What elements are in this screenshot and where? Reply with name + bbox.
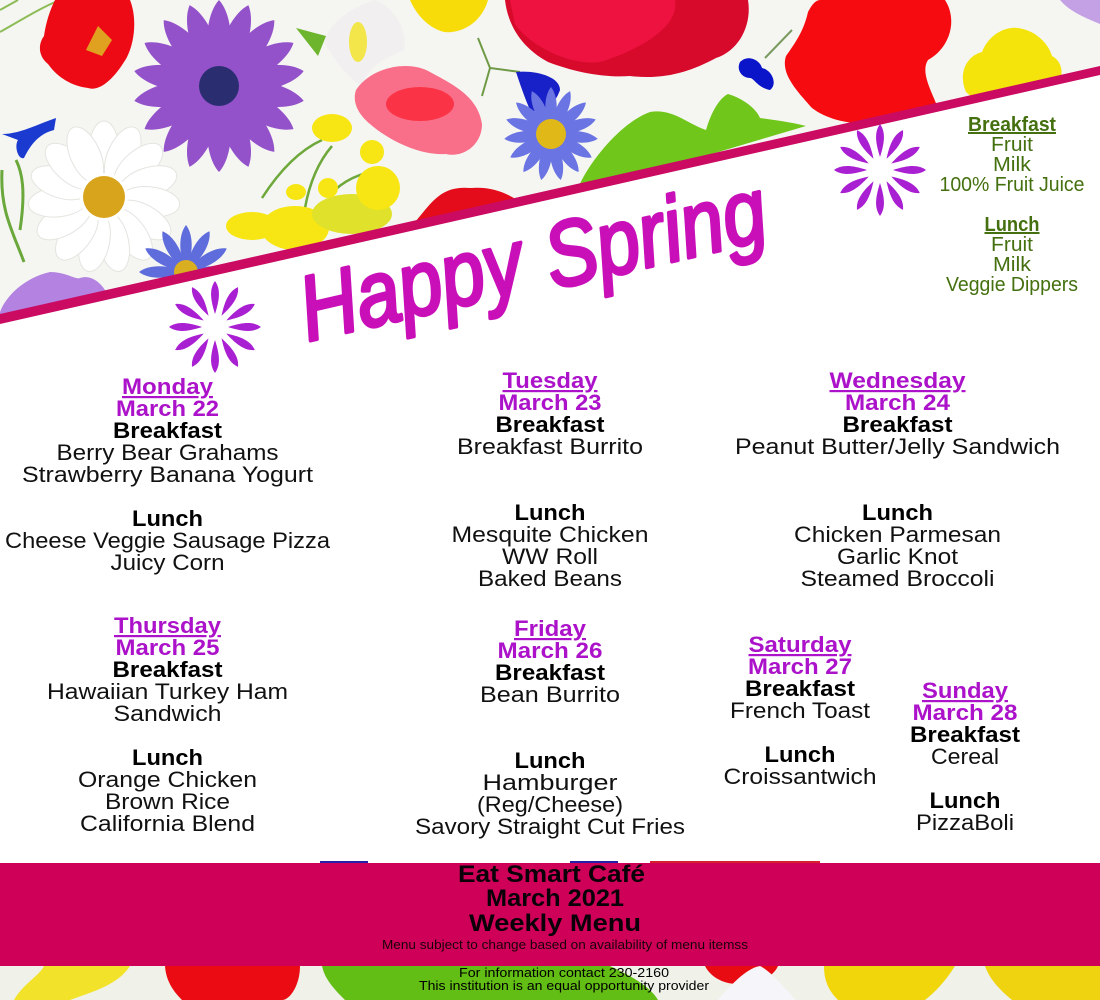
flower: red blossom behind ribbon	[416, 188, 514, 220]
panel: daily specials: Fruit	[991, 234, 1033, 256]
panel: Monday menu	[5, 374, 331, 575]
panel: Sunday menu	[910, 678, 1021, 835]
flower: yellow top	[410, 0, 488, 32]
panel: Wednesday menu: Peanut Butter/Jelly Sandwich	[735, 434, 1060, 459]
footer title	[458, 861, 645, 937]
panel: Friday menu: March 26	[498, 638, 602, 663]
diagonal pink ribbon	[0, 66, 1100, 324]
flower: purple daisy	[132, 0, 306, 172]
panel: Monday menu: Juicy Corn	[110, 550, 224, 575]
panel: daily specials	[940, 114, 1084, 296]
panel: Wednesday menu: Breakfast	[842, 412, 953, 437]
panel: Friday menu: Breakfast	[495, 660, 606, 685]
panel: Friday menu: Lunch	[514, 748, 586, 773]
panel: Wednesday menu	[735, 368, 1060, 591]
flower: lilac petals lower left	[0, 272, 105, 314]
panel: Monday menu: Monday	[122, 374, 214, 399]
panel: Sunday menu: March 28	[912, 700, 1018, 725]
panel: Sunday menu: PizzaBoli	[916, 810, 1014, 835]
flower: small blue daisy lower	[139, 225, 227, 278]
panel: Thursday menu: Lunch	[132, 745, 203, 770]
contact information: For information contact 230-2160	[459, 965, 669, 980]
flower: green leaf	[578, 94, 806, 190]
flower: red and white	[705, 966, 778, 984]
panel: Monday menu: March 22	[116, 396, 219, 421]
panel: Monday menu: Lunch	[132, 506, 203, 531]
left stem with blue bud	[2, 118, 56, 262]
flower: white daisy	[27, 121, 181, 274]
panel: Thursday menu: Brown Rice	[105, 789, 230, 814]
panel: Monday menu: Berry Bear Grahams	[56, 440, 278, 465]
flower: white and yellow blossom	[296, 22, 367, 62]
panel: Tuesday menu: March 23	[498, 390, 602, 415]
panel: Wednesday menu: Lunch	[862, 500, 933, 525]
panel: Monday menu: Strawberry Banana Yogurt	[22, 462, 313, 487]
flower: red petunia	[40, 0, 134, 89]
panel: daily specials: Lunch	[984, 214, 1040, 236]
title: Happy Spring: Happy	[289, 210, 537, 361]
panel: Saturday menu: March 27	[748, 654, 852, 679]
panel: daily specials: Fruit	[991, 134, 1033, 156]
panel: Thursday menu: Sandwich	[114, 701, 222, 726]
thin glimpse of flowers above band	[0, 860, 1100, 863]
panel: Wednesday menu: Steamed Broccoli	[800, 566, 994, 591]
panel: Saturday menu: Breakfast	[745, 676, 856, 701]
panel: Thursday menu: Hawaiian Turkey Ham	[47, 679, 288, 704]
flower: large crimson geranium	[505, 0, 749, 77]
panel: Wednesday menu: Chicken Parmesan	[794, 522, 1001, 547]
flower: coral pink petals	[355, 66, 482, 155]
icon: sunburst right	[834, 124, 926, 216]
panel: daily specials: 100% Fruit Juice	[940, 174, 1084, 196]
panel: Sunday menu: Cereal	[931, 744, 999, 769]
panel: Friday menu: Savory Straight Cut Fries	[415, 814, 685, 839]
panel: Saturday menu: Croissantwich	[724, 764, 876, 789]
flower: yellow right	[824, 966, 955, 1000]
footer band	[0, 861, 1100, 966]
panel: Thursday menu	[47, 613, 288, 836]
panel: Friday menu: Friday	[514, 616, 587, 641]
flower: yellow rapeseed cluster	[226, 114, 400, 250]
contact information	[419, 965, 710, 993]
panel: Tuesday menu: Tuesday	[502, 368, 598, 393]
panel: Tuesday menu: Breakfast Burrito	[457, 434, 643, 459]
title: Happy Spring: Spring	[534, 159, 776, 309]
panel: Sunday menu: Lunch	[930, 788, 1000, 813]
panel: daily specials: Milk	[993, 254, 1032, 276]
flower: lilac top right	[1060, 0, 1100, 24]
panel: Wednesday menu: Garlic Knot	[837, 544, 958, 569]
contact information: This institution is an equal opportunity provider	[419, 978, 710, 993]
panel: Tuesday menu: WW Roll	[502, 544, 598, 569]
footer note: Menu subject to change based on availability of menu itemss	[382, 937, 749, 952]
panel: daily specials: Milk	[993, 154, 1032, 176]
panel: Thursday menu: Thursday	[114, 613, 222, 638]
panel: Tuesday menu: Baked Beans	[478, 566, 622, 591]
panel: Monday menu: Breakfast	[113, 418, 223, 443]
top-left stems	[0, 0, 60, 32]
panel: Tuesday menu: Breakfast	[496, 412, 605, 437]
panel: Sunday menu: Breakfast	[910, 722, 1021, 747]
panel: Friday menu	[415, 616, 685, 839]
leaf: green	[322, 966, 658, 1000]
panel: Thursday menu: Breakfast	[112, 657, 223, 682]
footer title: Weekly Menu	[469, 910, 641, 937]
flower: red geranium	[785, 0, 951, 123]
panel: Tuesday menu: Lunch	[514, 500, 586, 525]
panel: Thursday menu: Orange Chicken	[78, 767, 257, 792]
panel: daily specials: Veggie Dippers	[946, 274, 1078, 296]
panel: Friday menu: Bean Burrito	[480, 682, 620, 707]
panel: Saturday menu	[724, 632, 876, 789]
flower: red	[165, 966, 300, 1000]
flower: yellow petunia	[962, 28, 1062, 96]
panel: Tuesday menu: Mesquite Chicken	[452, 522, 648, 547]
flower: blue daisy	[504, 87, 598, 181]
icon: sunburst left	[169, 281, 261, 373]
footer title: Eat Smart Café	[458, 861, 645, 888]
flower: yellow left	[14, 966, 130, 1000]
footer title: March 2021	[486, 885, 624, 912]
panel: daily specials: Breakfast	[968, 114, 1056, 136]
panel: Saturday menu: French Toast	[730, 698, 870, 723]
panel: Thursday menu: California Blend	[80, 811, 255, 836]
footer flower photo	[0, 860, 1100, 1000]
panel: Saturday menu: Saturday	[748, 632, 852, 657]
stem and blue blossom	[478, 38, 560, 111]
header flower photo	[0, 0, 1100, 330]
panel: Friday menu: (Reg/Cheese)	[477, 792, 623, 817]
title: Happy Spring	[289, 159, 776, 361]
panel: Wednesday menu: Wednesday	[830, 368, 966, 393]
flower: small blue lobelia	[739, 30, 792, 90]
panel: Monday menu: Cheese Veggie Sausage Pizza	[5, 528, 331, 553]
panel: Wednesday menu: March 24	[845, 390, 951, 415]
panel: Saturday menu: Lunch	[764, 742, 836, 767]
panel: Thursday menu: March 25	[116, 635, 220, 660]
flower: yellow far right	[985, 966, 1100, 1000]
panel: Sunday menu: Sunday	[922, 678, 1009, 703]
panel: Friday menu: Hamburger	[482, 770, 618, 795]
panel: Tuesday menu	[452, 368, 648, 591]
